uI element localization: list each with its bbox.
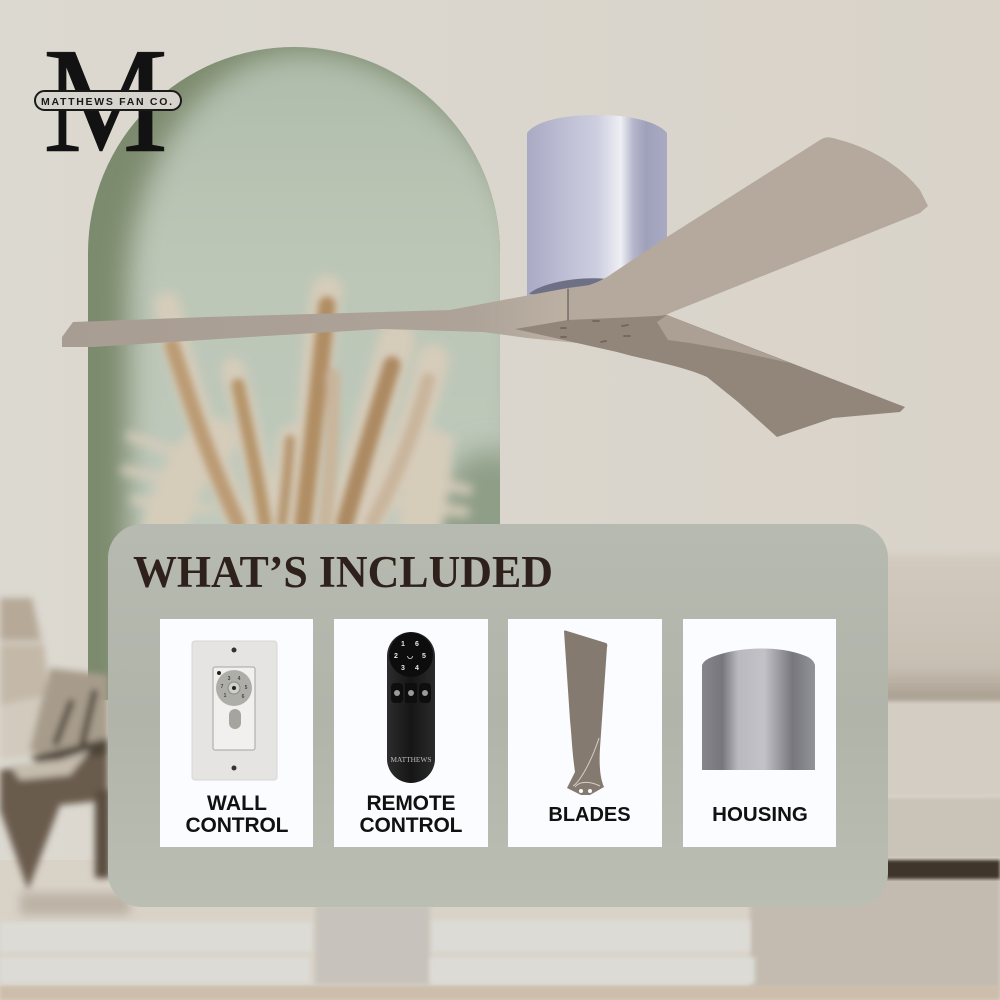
icon: wall control: 4 [238,676,241,682]
fan hub seam and screws [561,289,630,342]
background: green arched niche [88,47,500,700]
card: blades [508,619,662,847]
icon: remote control: 4 [415,665,419,672]
icon: remote control: 2 [394,653,398,660]
fan blade: left [62,288,577,347]
card: housing [683,619,836,847]
icon: wall control: 3 [228,676,231,682]
card: wall control [160,619,313,847]
label: housing: HOUSING [712,803,808,826]
icon: remote control: MATTHEWS [390,756,432,764]
label: remote control: REMOTE [366,792,456,815]
label: wall control: WALL [207,792,267,815]
icon: wall control: 7 [221,684,224,690]
background: armchair with throw blanket [0,598,110,890]
panel: what's included [108,524,888,907]
card: remote control [334,619,488,847]
fan blade: upper right [568,137,928,320]
fan housing [527,115,667,296]
icon: remote control: 1 [401,641,405,648]
fan hub underside and lower right blade [515,315,905,437]
logo: Matthews Fan Co.: MATTHEWS FAN CO. [41,96,172,108]
label: wall control: CONTROL [186,814,289,837]
background: pampas grass [125,290,468,525]
icon: blade [564,630,607,795]
icon: remote control: 6 [415,641,419,648]
heading: WHAT’S INCLUDED [133,547,553,597]
background: floor [0,860,1000,1000]
icon: housing [702,648,815,770]
icon: wall control: 5 [245,685,248,691]
ceiling fan [62,115,928,437]
fan blade fold highlight [657,315,790,363]
icon: wall control: 1 [224,693,227,699]
icon: wall control [192,641,277,780]
icon: remote control [387,632,435,783]
label: remote control: CONTROL [360,814,463,837]
icon: remote control: 5 [422,653,426,660]
icon: wall control: 6 [242,694,245,700]
icon: remote control: ◡ [407,653,413,660]
background: sofa at right [880,555,1000,858]
label: blades: BLADES [548,804,631,826]
icon: remote control: 3 [401,665,405,672]
logo: Matthews Fan Co.: M [43,16,168,184]
